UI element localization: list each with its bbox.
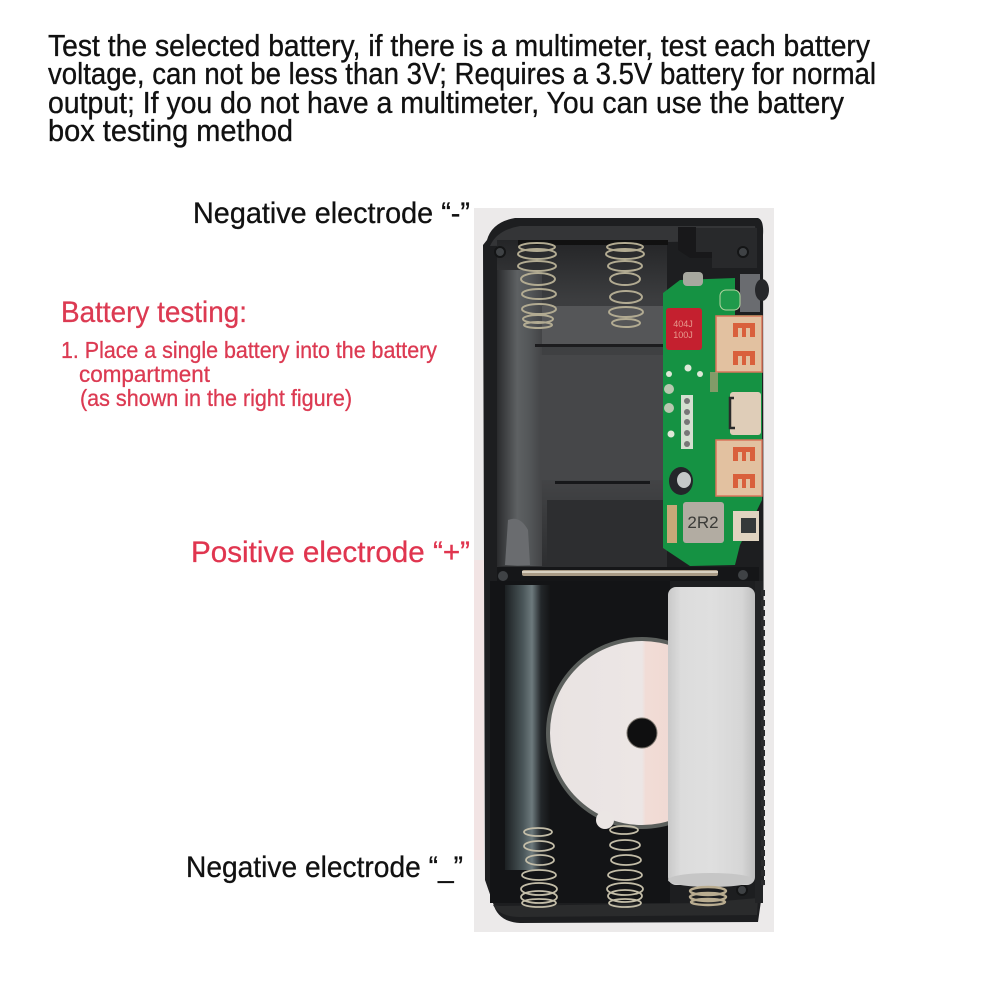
title: box testing method <box>48 113 293 148</box>
title: voltage, can not be less than 3V; Requires a 3.5V battery for normal <box>48 56 876 91</box>
micro USB port <box>733 511 759 541</box>
text block: step 1: compartment <box>79 361 211 387</box>
text block: step 1 <box>61 337 437 411</box>
label: negative electrode bottom: Negative electrode “_” <box>186 851 463 884</box>
panel: battery testing instructions <box>61 296 437 411</box>
icon: upper middle spring <box>606 243 644 327</box>
battery case shell <box>483 218 764 923</box>
icon: lower middle spring <box>607 826 643 907</box>
capacitor <box>666 308 702 350</box>
icon: screw holes <box>495 247 748 896</box>
battery cell <box>668 587 755 887</box>
text block: step 1: (as shown in the right figure) <box>80 385 352 411</box>
icon: lower left spring <box>521 828 557 907</box>
inductor 2R2 <box>683 502 724 543</box>
upper compartment <box>497 227 757 570</box>
inductor 2R2: 2R2 <box>687 513 719 532</box>
small electrolytic capacitor <box>669 467 693 495</box>
lower compartment <box>490 581 763 903</box>
USB port lower <box>716 440 762 496</box>
heading: battery testing: Battery testing: <box>61 296 247 329</box>
text block: step 1: 1. Place a single battery into the battery <box>61 337 437 363</box>
circuit board: 404J <box>673 319 693 329</box>
title <box>48 28 876 148</box>
circuit board <box>663 272 769 566</box>
photo: battery box <box>474 208 774 932</box>
title: output; If you do not have a multimeter, You can use the battery <box>48 85 844 120</box>
label: negative electrode top: Negative electrode “-” <box>193 197 470 230</box>
circuit board: 100J <box>673 330 693 340</box>
icon: spring under battery <box>690 887 726 905</box>
title: Test the selected battery, if there is a multimeter, test each battery <box>48 28 870 63</box>
label: positive electrode: Positive electrode “+” <box>191 536 470 569</box>
icon: upper left spring <box>518 243 556 328</box>
speaker disc <box>546 637 668 829</box>
contact bar <box>497 567 759 581</box>
header pins <box>681 395 693 449</box>
USB-C port <box>730 392 761 435</box>
USB port upper <box>716 316 762 372</box>
